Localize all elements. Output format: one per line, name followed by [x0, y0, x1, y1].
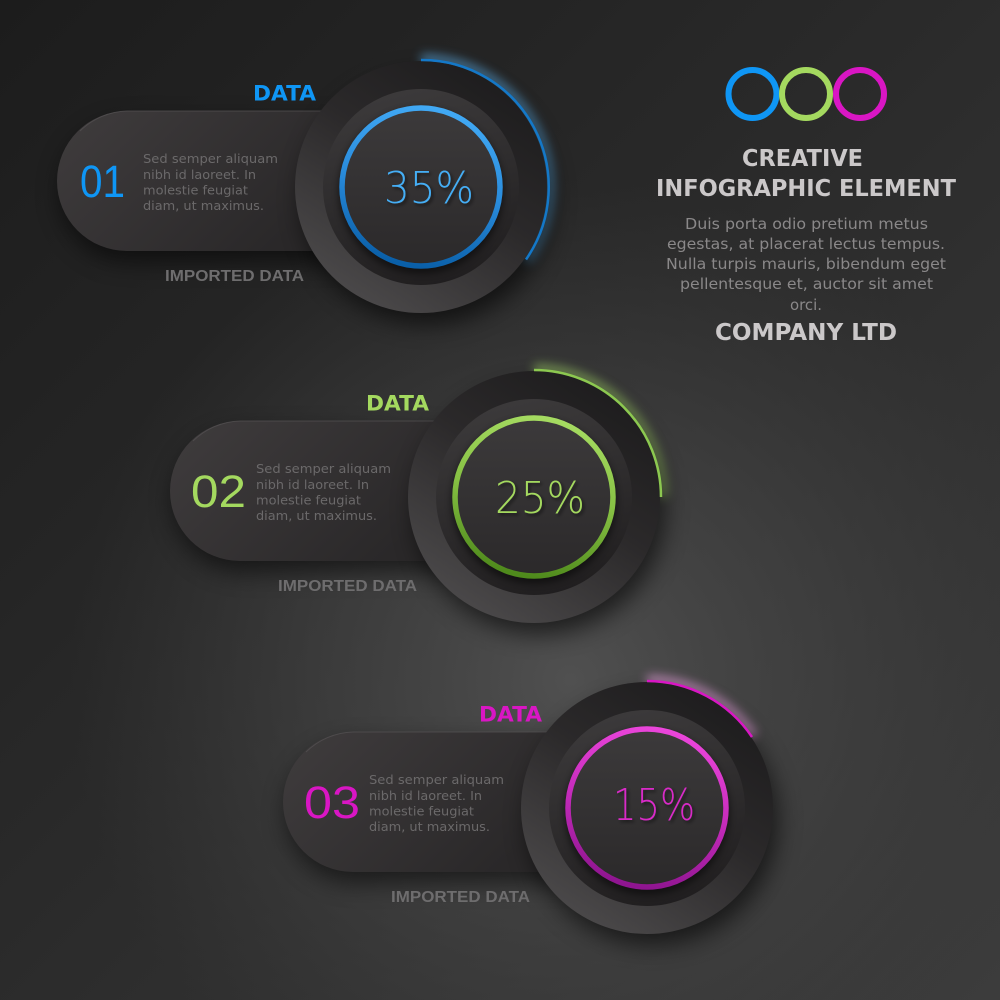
dial 02	[408, 370, 665, 634]
label: DATA 01: DATA	[253, 82, 317, 106]
description paragraph: orci.	[790, 296, 822, 314]
text block 02: molestie feugiat	[256, 494, 361, 508]
description paragraph: pellentesque et, auctor sit amet	[680, 275, 933, 293]
text block 01: diam, ut maximus.	[143, 199, 264, 214]
dial 02: 25%	[495, 473, 585, 524]
title	[656, 146, 956, 202]
dial 03	[521, 681, 778, 945]
number 02: 02	[191, 466, 246, 517]
logo: three rings	[728, 70, 884, 118]
text block 03: Sed semper aliquam	[369, 773, 504, 788]
title: CREATIVE	[742, 146, 863, 172]
description paragraph	[666, 215, 946, 314]
label: imported data 02: IMPORTED DATA	[278, 578, 417, 595]
description paragraph: Nulla turpis mauris, bibendum eget	[666, 255, 946, 273]
panel: item 02	[170, 369, 665, 634]
text block 02: diam, ut maximus.	[256, 509, 377, 524]
text block 01: Sed semper aliquam	[143, 152, 278, 167]
dial 01: 35%	[384, 163, 474, 214]
text block 02: Sed semper aliquam	[256, 462, 391, 477]
dial 03: 15%	[613, 780, 695, 831]
arc glow 03	[647, 680, 753, 736]
label: imported data 01: IMPORTED DATA	[165, 268, 304, 285]
description paragraph: egestas, at placerat lectus tempus.	[667, 235, 945, 253]
panel: item 03	[283, 680, 778, 945]
number 03: 03	[304, 777, 360, 828]
text block 01: nibh id laoreet. In	[143, 168, 256, 183]
text block 02	[256, 462, 391, 524]
title: INFOGRAPHIC ELEMENT	[656, 176, 956, 202]
label: imported data 03: IMPORTED DATA	[391, 889, 530, 906]
text block 03	[369, 773, 504, 835]
description paragraph: Duis porta odio pretium metus	[685, 215, 928, 233]
text block 01	[143, 152, 278, 214]
text block 03: nibh id laoreet. In	[369, 789, 482, 804]
dial 01	[295, 60, 552, 324]
arc glow 02	[534, 369, 662, 497]
panel: item 01	[57, 59, 552, 324]
arc glow 01	[421, 59, 549, 260]
pill: item 01	[57, 111, 417, 262]
text block 03: molestie feugiat	[369, 804, 474, 820]
pill: item 03	[283, 732, 643, 883]
text block 01: molestie feugiat	[143, 184, 248, 198]
company name: COMPANY LTD	[715, 320, 897, 346]
pill: item 02	[170, 421, 530, 572]
label: DATA 03: DATA	[479, 702, 543, 726]
label: DATA 02: DATA	[366, 392, 430, 416]
number 01: 01	[80, 156, 125, 207]
text block 02: nibh id laoreet. In	[256, 478, 369, 493]
text block 03: diam, ut maximus.	[369, 820, 490, 835]
